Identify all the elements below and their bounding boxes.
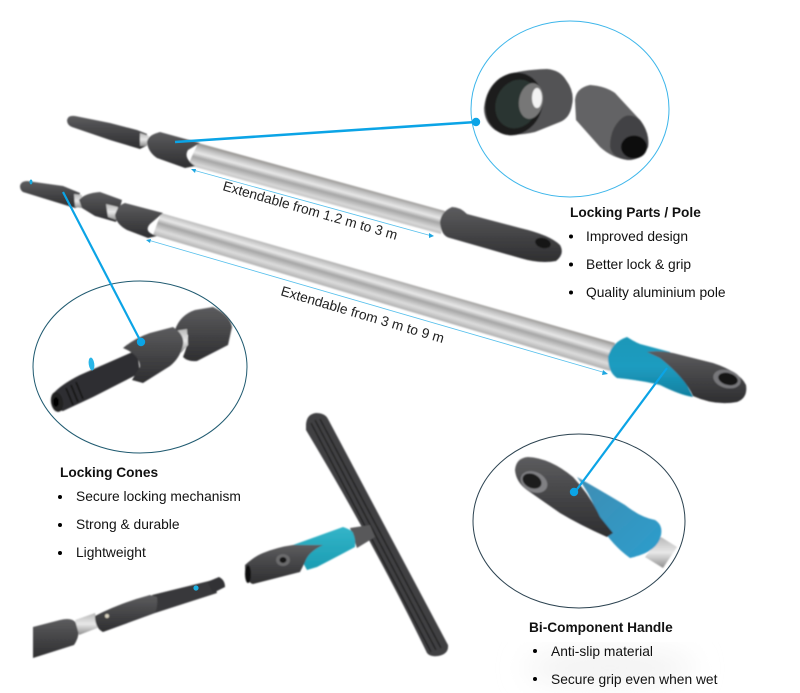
- dimension arrow: 1.2 m to 3 m: [191, 169, 434, 238]
- short telescopic pole: [67, 116, 562, 262]
- icon: open locking collar: [475, 63, 573, 145]
- callout circle: locking cones: [33, 281, 247, 453]
- T-bar applicator: [245, 413, 448, 656]
- text block: locking cones: Locking Cones: [60, 465, 158, 480]
- callout circle: locking parts: [471, 21, 669, 197]
- text block: locking parts: Improved design: [586, 229, 688, 244]
- text block: bi-component handle: Bi-Component Handle: [529, 620, 673, 635]
- text block: locking cones: [58, 465, 241, 560]
- text block: locking cones: Secure locking mechanism: [76, 489, 241, 504]
- text block: locking cones: Lightweight: [76, 545, 146, 560]
- text block: bi-component handle: [529, 620, 718, 687]
- text block: locking parts: [569, 205, 726, 300]
- tip marker on long pole: [30, 180, 32, 184]
- callout circle: bi-component handle: [473, 434, 685, 608]
- text block: bi-component handle: Anti-slip material: [551, 644, 653, 659]
- dimension arrow: 3 m to 9 m: [146, 239, 608, 375]
- text block: locking parts: Quality aluminium pole: [586, 285, 726, 300]
- icon: tapered locking sleeve: [575, 85, 648, 160]
- icon: blue pin: [88, 357, 95, 371]
- icon: handle close-up: [515, 457, 677, 568]
- leader line: bi-component handle: [570, 368, 667, 496]
- label: extendable 3 m to 9 m: Extendable from 3 m to 9 m: [279, 283, 446, 346]
- text block: locking parts: Better lock & grip: [586, 257, 691, 272]
- text block: bi-component handle: Secure grip even when wet: [551, 672, 718, 687]
- faint shadow behind bottom text: [525, 652, 695, 684]
- text block: locking cones: Strong & durable: [76, 517, 180, 532]
- label: extendable 1.2 m to 3 m: Extendable from 1.2 m to 3 m: [221, 178, 399, 243]
- long telescopic pole: [20, 181, 746, 403]
- detached pole end: [33, 577, 225, 658]
- leader line: locking parts: [175, 118, 480, 142]
- icon: locking cone close-up: [49, 307, 232, 413]
- leader line: locking cones: [63, 192, 145, 346]
- text block: locking parts: Locking Parts / Pole: [570, 205, 701, 220]
- icon: blue button on pole end: [193, 585, 199, 591]
